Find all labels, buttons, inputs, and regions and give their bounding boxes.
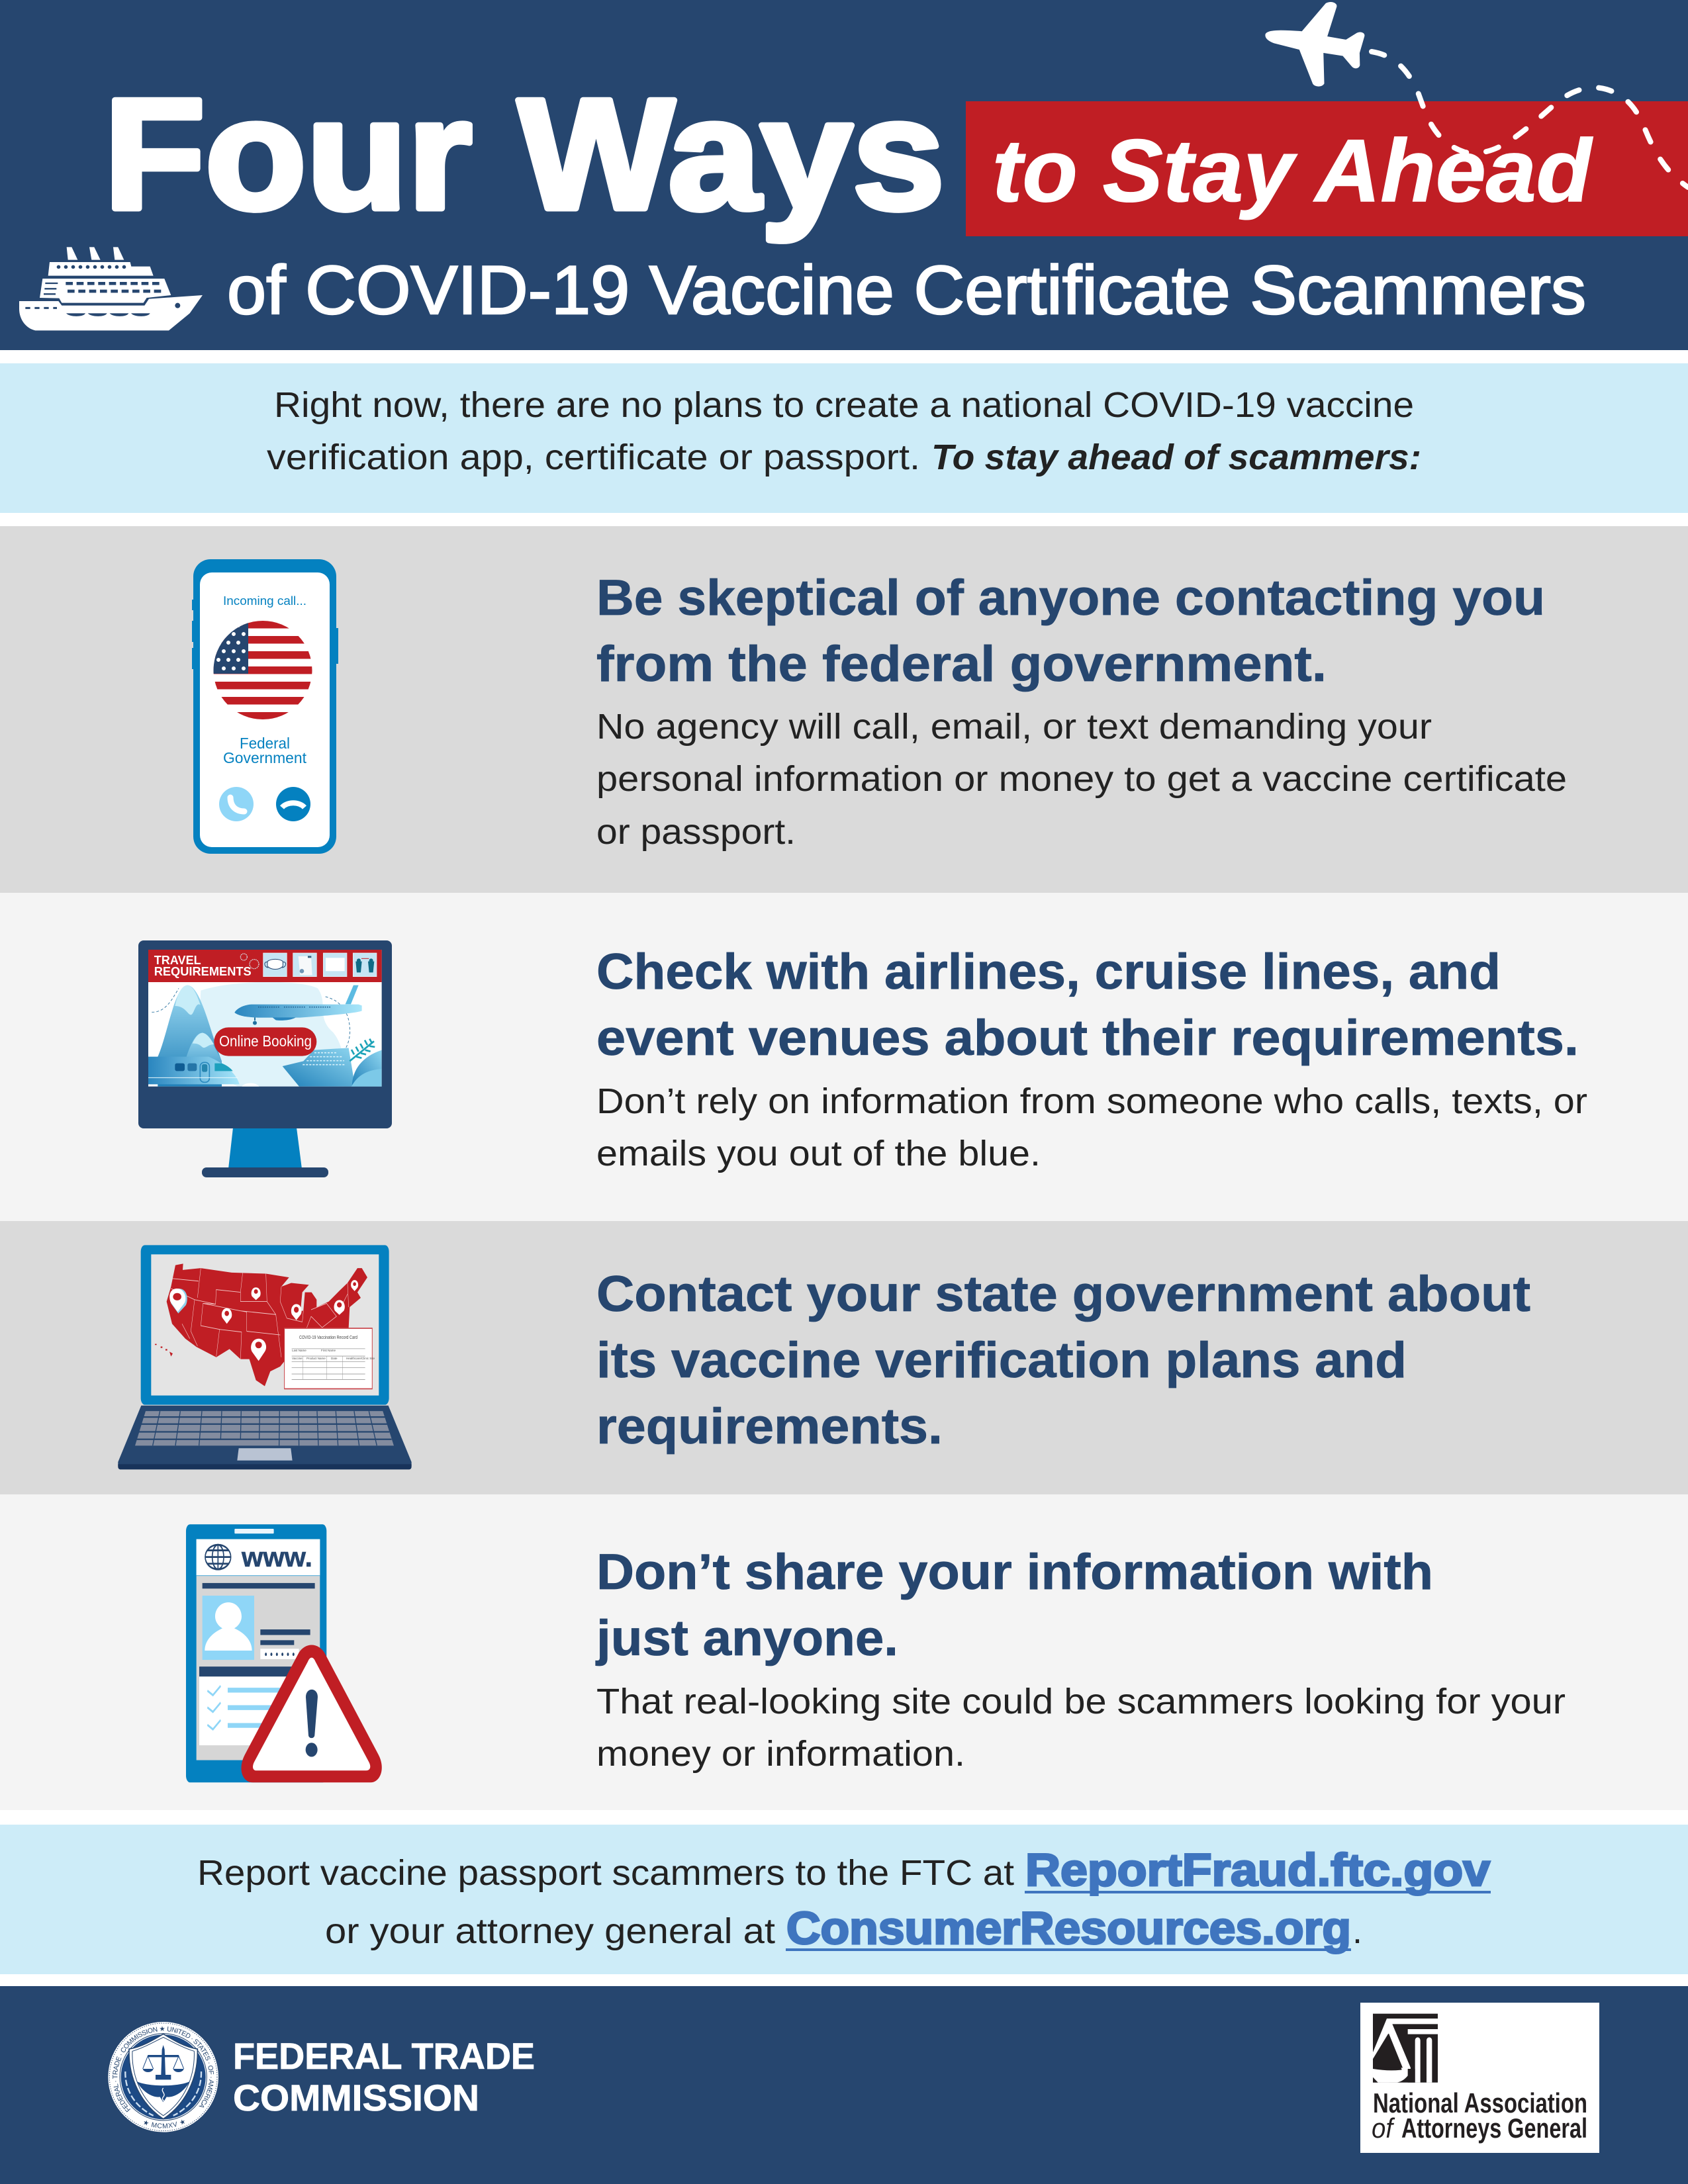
intro emphasis: To stay ahead of scammers: xyxy=(931,437,1421,477)
heading: Don’t share your information with xyxy=(596,1544,1433,1600)
icon: laptop with US map xyxy=(118,1245,412,1469)
report line 2: or your attorney general at xyxy=(325,1911,775,1951)
vaccination card columns: First Name xyxy=(321,1349,336,1352)
heading: Be skeptical of anyone contacting you xyxy=(596,570,1545,626)
icon: dashed flight path xyxy=(1372,52,1688,187)
caller label: Government xyxy=(223,749,307,766)
heading xyxy=(596,570,1545,692)
NAAG logo xyxy=(1360,2003,1599,2153)
heading xyxy=(595,1544,1433,1666)
incoming call label: Incoming call... xyxy=(223,594,306,608)
panel: dont share xyxy=(0,1494,1688,1810)
monitor heading xyxy=(154,953,252,978)
body text: That real-looking site could be scammers looking for your xyxy=(596,1682,1566,1721)
heading: event venues about their requirements. xyxy=(596,1010,1579,1066)
intro panel xyxy=(0,363,1688,513)
footer xyxy=(0,1986,1688,2184)
red ribbon: to Stay Ahead xyxy=(966,101,1688,236)
panel: contact state government xyxy=(0,1221,1688,1494)
icon: phone incoming call xyxy=(192,559,338,854)
panel: check with airlines xyxy=(0,893,1688,1221)
report line 1: Report vaccine passport scammers to the FTC at xyxy=(197,1853,1014,1893)
decline button xyxy=(276,787,310,821)
link: ReportFraud.ftc.gov: ReportFraud.ftc.gov xyxy=(1025,1844,1491,1895)
icon: desktop monitor with travel requirements page xyxy=(138,940,392,1177)
vaccination card columns: Vaccine xyxy=(292,1357,303,1360)
intro line 1: Right now, there are no plans to create a national COVID-19 vaccine xyxy=(274,385,1414,425)
body text: No agency will call, email, or text demanding your xyxy=(596,707,1432,747)
red ribbon: to Stay Ahead: to Stay Ahead xyxy=(992,122,1593,220)
body text: personal information or money to get a vaccine certificate xyxy=(596,759,1567,799)
monitor heading: TRAVEL xyxy=(154,953,201,967)
vaccination card columns: Product Name xyxy=(306,1357,326,1360)
heading xyxy=(596,944,1579,1066)
FTC seal: ★ MCMXV ★ xyxy=(144,2119,185,2128)
heading: from the federal government. xyxy=(596,636,1327,692)
intro line 2: verification app, certificate or passport. xyxy=(267,437,920,477)
heading: Check with airlines, cruise lines, and xyxy=(596,944,1501,1000)
panel: be skeptical xyxy=(0,526,1688,893)
report panel xyxy=(0,1825,1688,1974)
flag xyxy=(213,621,312,720)
www label: www. xyxy=(241,1541,312,1572)
NAAG logo: Attorneys General xyxy=(1401,2113,1587,2144)
body text: Don’t rely on information from someone who calls, texts, or xyxy=(596,1081,1587,1121)
header banner xyxy=(0,0,1688,350)
heading: its vaccine verification plans and xyxy=(596,1332,1407,1388)
caller label xyxy=(223,735,307,766)
FTC seal: FEDERAL · TRADE · COMMISSION ★ UNITED · STATES · OF · AMERICA xyxy=(113,2026,214,2113)
body text: or passport. xyxy=(596,812,796,852)
FTC wordmark xyxy=(233,2035,535,2118)
heading: Contact your state government about xyxy=(596,1266,1530,1322)
subtitle: of COVID-19 Vaccine Certificate Scammers xyxy=(227,252,1586,329)
link: ConsumerResources.org: ConsumerResources.org xyxy=(786,1903,1351,1954)
period: . xyxy=(1352,1911,1362,1951)
body text: money or information. xyxy=(596,1734,965,1774)
FTC wordmark: FEDERAL TRADE xyxy=(233,2035,535,2077)
icon: fake website on a phone with warning sign xyxy=(186,1524,382,1782)
body text: emails you out of the blue. xyxy=(596,1134,1041,1173)
vaccination card columns xyxy=(292,1349,375,1360)
vaccination record card title: COVID-19 Vaccination Record Card xyxy=(299,1334,357,1340)
answer button xyxy=(219,787,254,821)
body text xyxy=(596,1682,1566,1774)
vaccination card columns: Last Name xyxy=(292,1349,306,1352)
icon: cruise ship xyxy=(19,247,203,330)
location pins xyxy=(169,1280,358,1361)
caller label: Federal xyxy=(240,735,290,752)
title: Four Ways: Four Ways xyxy=(104,67,945,242)
heading: just anyone. xyxy=(595,1610,898,1666)
NAAG logo: National Association xyxy=(1373,2087,1587,2118)
FTC wordmark: COMMISSION xyxy=(233,2077,479,2118)
body text xyxy=(596,707,1567,852)
vaccination card columns: Healthcare/Clinic Site xyxy=(346,1357,375,1360)
body text xyxy=(596,1081,1587,1173)
heading xyxy=(596,1266,1530,1455)
US map xyxy=(155,1263,367,1387)
vaccination card columns: Date xyxy=(331,1357,338,1360)
online booking button label: Online Booking xyxy=(219,1032,312,1050)
icon: airplane xyxy=(1266,3,1364,85)
NAAG logo: of xyxy=(1372,2113,1395,2144)
heading: requirements. xyxy=(596,1398,943,1455)
monitor heading: REQUIREMENTS xyxy=(154,964,252,978)
